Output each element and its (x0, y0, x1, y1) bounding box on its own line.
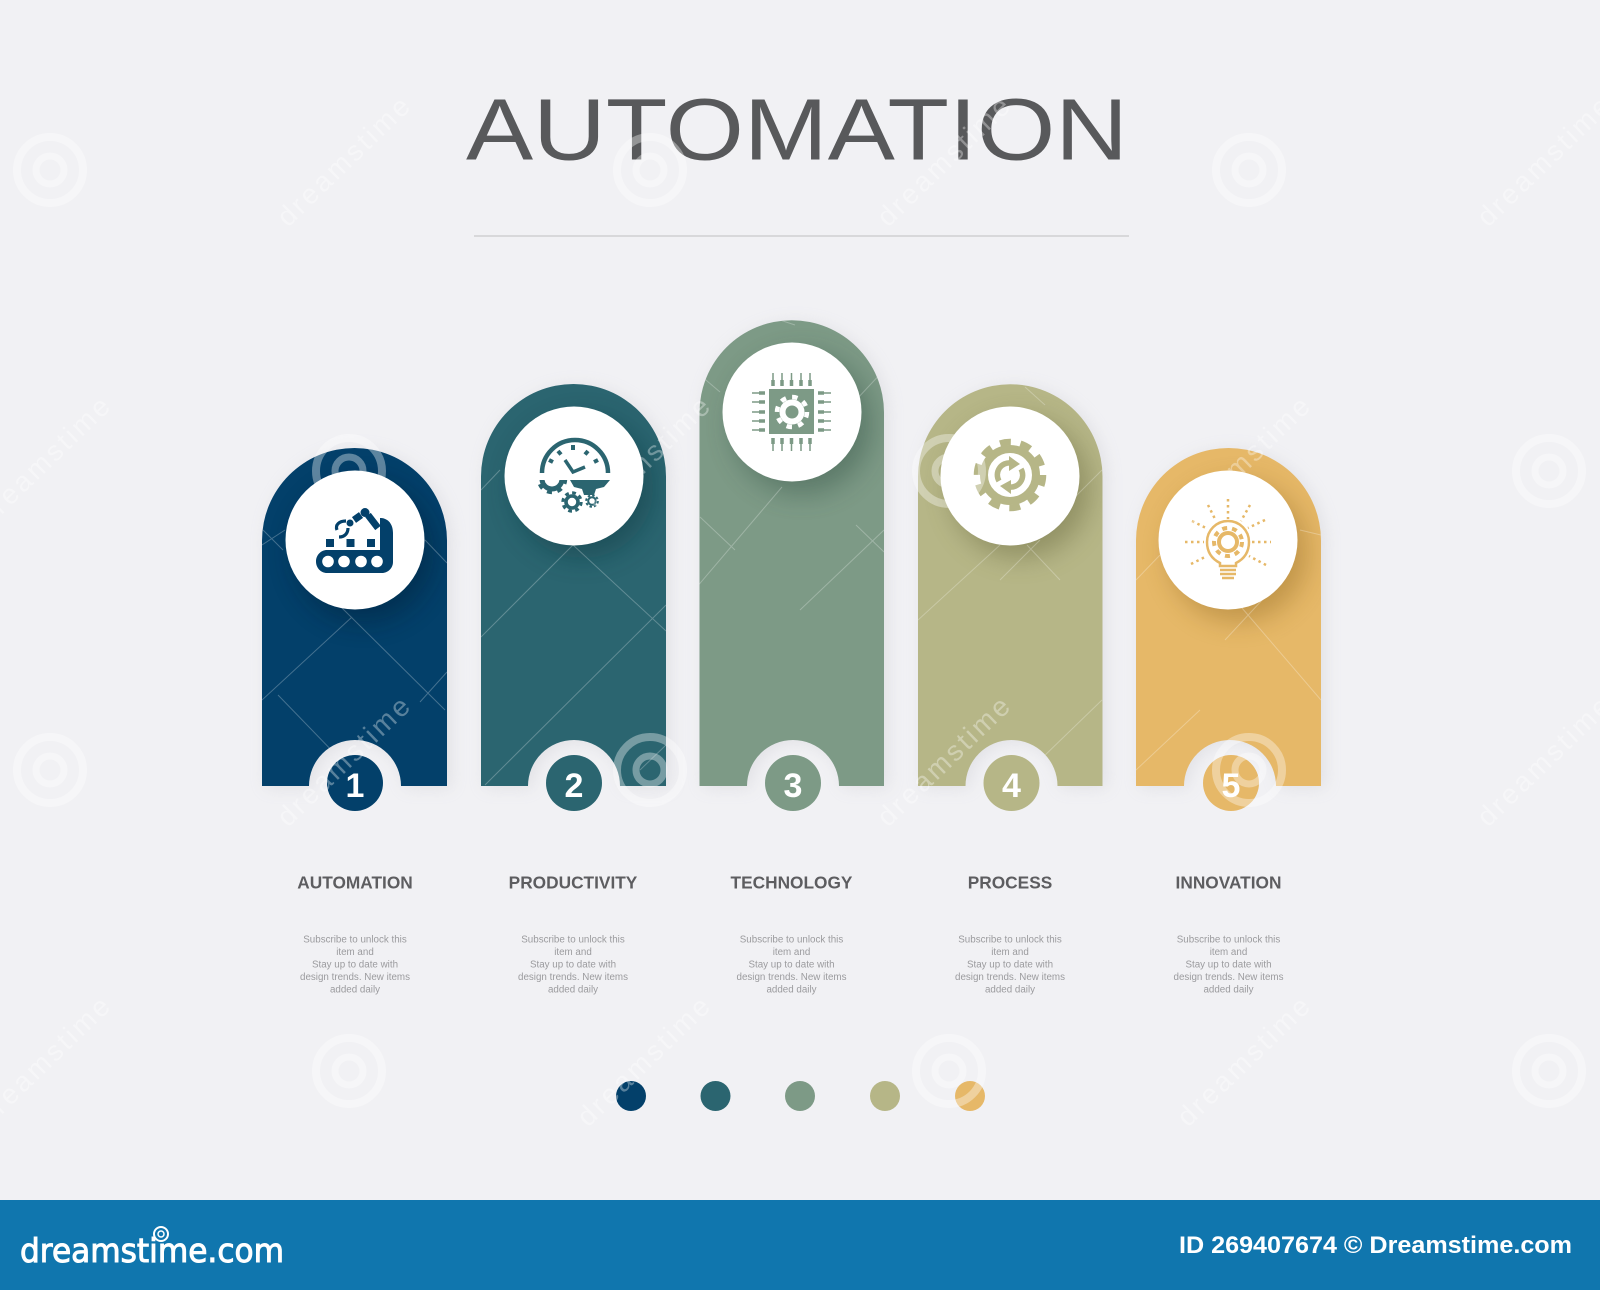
text block: process: item and (991, 947, 1029, 958)
text block: innovation: design trends. New items (1174, 972, 1284, 983)
number badge 5: 5 (1222, 767, 1240, 805)
footer logo: dreamstime.com (20, 1231, 284, 1270)
text block: productivity: Stay up to date with (530, 960, 616, 970)
watermark overlay: dreamstime (271, 691, 416, 832)
panel: step 2 productivity bar (481, 384, 670, 788)
text block: automation (297, 872, 413, 996)
text block: productivity: PRODUCTIVITY (509, 872, 638, 892)
icon circle: clock with gears (504, 406, 644, 546)
text block: automation: item and (336, 947, 374, 958)
watermark overlay: dreamstime (871, 691, 1016, 832)
text block: technology (731, 872, 853, 996)
text block: automation: Stay up to date with (312, 960, 398, 970)
text block: productivity (509, 872, 638, 996)
watermark overlay: dreamstime (271, 91, 416, 232)
text block: innovation: INNOVATION (1176, 872, 1281, 892)
watermark overlay: dreamstime (571, 391, 716, 532)
text block: automation: added daily (330, 984, 380, 996)
legend dots (616, 1081, 985, 1111)
text block: innovation: added daily (1203, 984, 1254, 996)
footer bar (0, 1200, 1600, 1290)
text block: technology: added daily (766, 984, 817, 996)
watermark overlay: dreamstime (871, 91, 1016, 232)
number badge 2: 2 (565, 767, 583, 805)
text block: technology: TECHNOLOGY (731, 872, 853, 892)
text block: innovation (1174, 872, 1284, 996)
text block: productivity: design trends. New items (518, 972, 628, 983)
number badge 1 (327, 755, 383, 811)
number badge 3: 3 (784, 767, 802, 805)
panel: step 5 innovation bar (1136, 448, 1325, 788)
watermark overlay: dreamstime (1171, 991, 1316, 1132)
text block: technology: design trends. New items (736, 972, 847, 983)
text block: productivity: Subscribe to unlock this (521, 934, 625, 946)
text block: automation: AUTOMATION (297, 872, 413, 892)
text block: productivity: item and (554, 947, 592, 958)
panel: step 1 automation bar (262, 448, 451, 790)
text block: technology: Subscribe to unlock this (740, 934, 843, 946)
number badge 2 (546, 755, 602, 811)
icon circle: light bulb with gear (1158, 470, 1298, 610)
number badge 4: 4 (1002, 767, 1021, 805)
text block: innovation: item and (1210, 947, 1247, 958)
number badge 4 (984, 755, 1040, 811)
number badge 3 (765, 755, 821, 811)
text block: technology: item and (773, 947, 810, 958)
number badge 1: 1 (346, 767, 364, 805)
watermark overlay: dreamstime (1171, 391, 1316, 532)
text block: process: Subscribe to unlock this (958, 934, 1062, 946)
text block: innovation: Stay up to date with (1185, 960, 1272, 970)
panel: step 4 process bar (918, 384, 1106, 788)
text block: automation: Subscribe to unlock this (303, 934, 407, 946)
number badge 5 (1203, 755, 1259, 811)
icon circle: chip with gear (722, 342, 862, 482)
icon circle: gear with refresh arrows (940, 406, 1080, 546)
text block: process: PROCESS (968, 872, 1052, 892)
text block: process: Stay up to date with (967, 960, 1053, 970)
text block: innovation: Subscribe to unlock this (1177, 934, 1280, 946)
footer image id: ID 269407674 © Dreamstime.com (1179, 1232, 1572, 1259)
panel: step 3 technology bar (690, 320, 888, 788)
text block: automation: design trends. New items (300, 972, 410, 983)
text block: technology: Stay up to date with (748, 960, 835, 970)
title: AUTOMATION (466, 81, 1128, 178)
icon circle: conveyor (286, 470, 424, 610)
text block: process (955, 872, 1065, 996)
text block: process: added daily (985, 984, 1035, 996)
text block: process: design trends. New items (955, 972, 1065, 983)
text block: productivity: added daily (548, 984, 598, 996)
watermark overlay: dreamstime (571, 991, 716, 1132)
